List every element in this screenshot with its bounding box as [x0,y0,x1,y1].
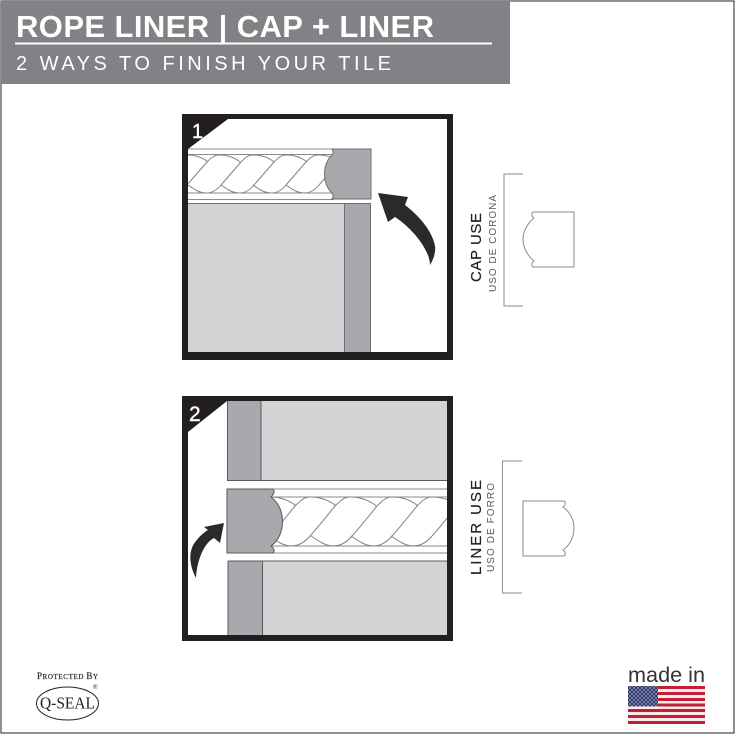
corner badge 2 [188,401,227,432]
cap use heading: CAP USE [468,213,485,282]
lower tile 2 [228,561,447,635]
made in usa mark: made in [628,664,705,687]
liner use heading: LINER USE [468,480,485,575]
arrow 1 [378,193,435,265]
title: ROPE LINER | CAP + LINER [16,9,434,44]
panel frame 2 [182,396,453,641]
tile 1 [188,204,371,354]
corner badge 1 [188,119,228,149]
corner badge 2: 2 [189,403,201,426]
panel 1: cap use diagram [182,114,453,360]
panel frame 1 [182,114,453,360]
made in usa mark [628,664,705,724]
liner use spanish: USO DE FORRO [486,483,497,572]
header banner [1,1,510,84]
panel 2: liner use diagram [182,396,472,641]
subtitle: 2 WAYS TO FINISH YOUR TILE [16,53,391,75]
q-seal logo [36,671,98,720]
rope liner 1 [188,148,334,200]
cap use spanish: USO DE CORONA [488,195,499,292]
upper tile 2 [227,401,447,480]
liner profile [523,501,574,556]
corner badge 1: 1 [192,121,203,143]
rope liner 2 [272,488,447,554]
us flag [628,686,705,724]
q-seal logo: Q-SEAL [40,694,95,712]
q-seal logo: ® [93,684,98,691]
cap piece 1 [324,149,371,199]
cap piece 2 [227,489,282,553]
q-seal logo: PROTECTED BY [37,671,98,681]
cap bracket [504,174,523,306]
liner use label [468,480,497,575]
cap use label [468,195,499,292]
arrow 2 [190,523,224,578]
cap profile [523,212,574,267]
liner bracket [502,461,522,593]
